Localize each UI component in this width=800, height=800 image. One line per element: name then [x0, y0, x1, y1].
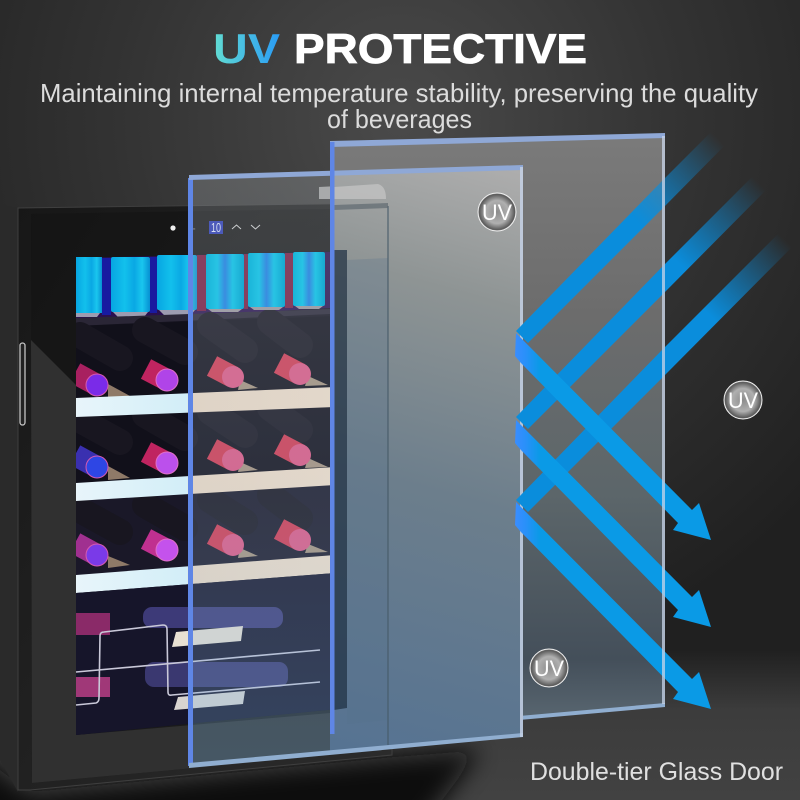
- arrow 2: [515, 420, 711, 627]
- UV badge top: [478, 193, 516, 231]
- row of cans left of glass: [76, 252, 330, 326]
- wine cooler: [0, 184, 392, 792]
- cans behind glass: [206, 252, 325, 312]
- control panel: [170, 220, 260, 236]
- wire rack: [76, 625, 320, 705]
- UV badge right: UV: [728, 388, 758, 413]
- front glass right pane: [330, 167, 523, 752]
- UV badge bottom: UV: [534, 656, 564, 681]
- arrow 1: [515, 333, 711, 540]
- front glass edges: [188, 165, 523, 768]
- front glass left pane tint: [189, 174, 330, 767]
- door handle: [20, 343, 25, 425]
- title: UV: [213, 25, 280, 72]
- ray 2 incoming: [516, 164, 778, 429]
- subtitle: [40, 78, 758, 134]
- back glass panel: [330, 133, 665, 737]
- UV badge top: UV: [482, 200, 512, 225]
- cooler top handle: [319, 184, 386, 199]
- UV rays incoming: [516, 118, 800, 512]
- wooden shelves: [76, 387, 335, 593]
- wood shelf tops: [108, 384, 130, 398]
- back glass right edge: [662, 136, 665, 704]
- cooler door: [18, 203, 392, 790]
- UV badge right: [724, 381, 762, 419]
- cooler body: [0, 205, 18, 792]
- subtitle: of beverages: [327, 104, 472, 134]
- control panel: 10: [211, 220, 221, 235]
- back glass left edge: [330, 142, 334, 734]
- bottles shelf rows: [76, 316, 335, 575]
- caption: Double-tier Glass Door: [530, 758, 783, 786]
- control panel: +: [188, 221, 196, 236]
- UV rays reflected arrows: [515, 333, 711, 709]
- lower bottles: [76, 573, 347, 735]
- ray 3 incoming: [516, 222, 800, 512]
- subtitle: Maintaining internal temperature stability, preserving the quality: [40, 78, 758, 108]
- cooler interior: [76, 250, 347, 735]
- arrow 3: [515, 502, 711, 709]
- ray 1 incoming: [516, 118, 738, 343]
- bottle caps: [75, 363, 311, 566]
- UV badge bottom: [530, 649, 568, 687]
- dark bottle bodies: [80, 322, 300, 532]
- title: PROTECTIVE: [294, 25, 587, 72]
